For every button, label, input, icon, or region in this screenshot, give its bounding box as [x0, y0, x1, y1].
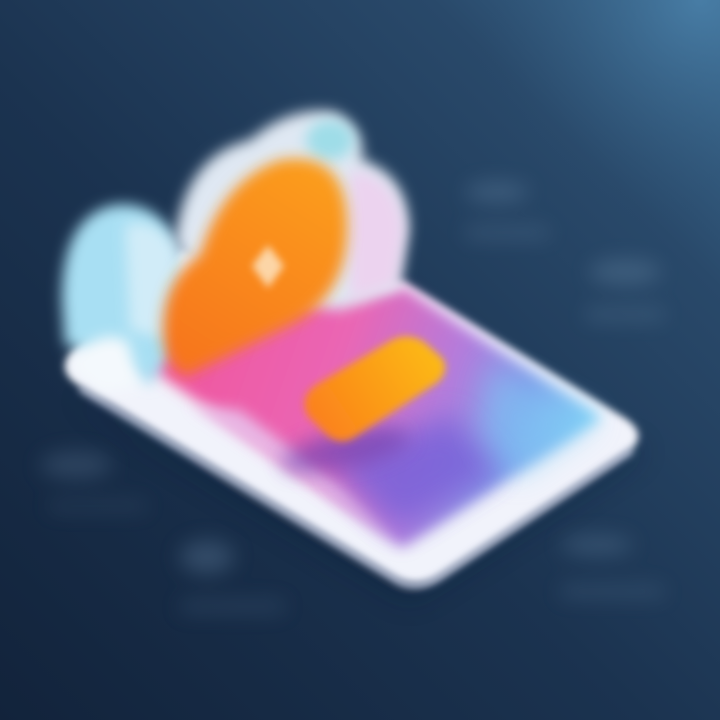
cloud: white left highlight [68, 337, 140, 392]
cloud: pale right side of blue lobe [125, 223, 180, 340]
screen lilac fade on lower edge [190, 405, 395, 540]
orange card [304, 336, 445, 441]
orange card shadow [278, 419, 412, 481]
blurred label: far right [585, 259, 665, 321]
phone [65, 250, 638, 585]
cloud: cyan accent [306, 120, 354, 160]
blurred label: top right [465, 181, 550, 239]
phone edge shading [80, 388, 632, 585]
screen violet lower area [330, 415, 500, 530]
phone screen [142, 260, 602, 548]
cloud: orange shape [163, 159, 347, 376]
blurred label: lower left [40, 451, 148, 512]
cloud [62, 111, 408, 392]
phone shadow [70, 395, 645, 600]
blurred label: bottom centre [180, 540, 285, 613]
blurred label: bottom right [560, 534, 665, 598]
screen bright blue corner [480, 365, 598, 478]
cloud: white back lobe [175, 111, 408, 310]
cloud: lilac side [350, 170, 404, 300]
cloud: light blue left lobe [62, 205, 180, 385]
cloud: white star [252, 245, 284, 288]
phone body [65, 250, 638, 584]
